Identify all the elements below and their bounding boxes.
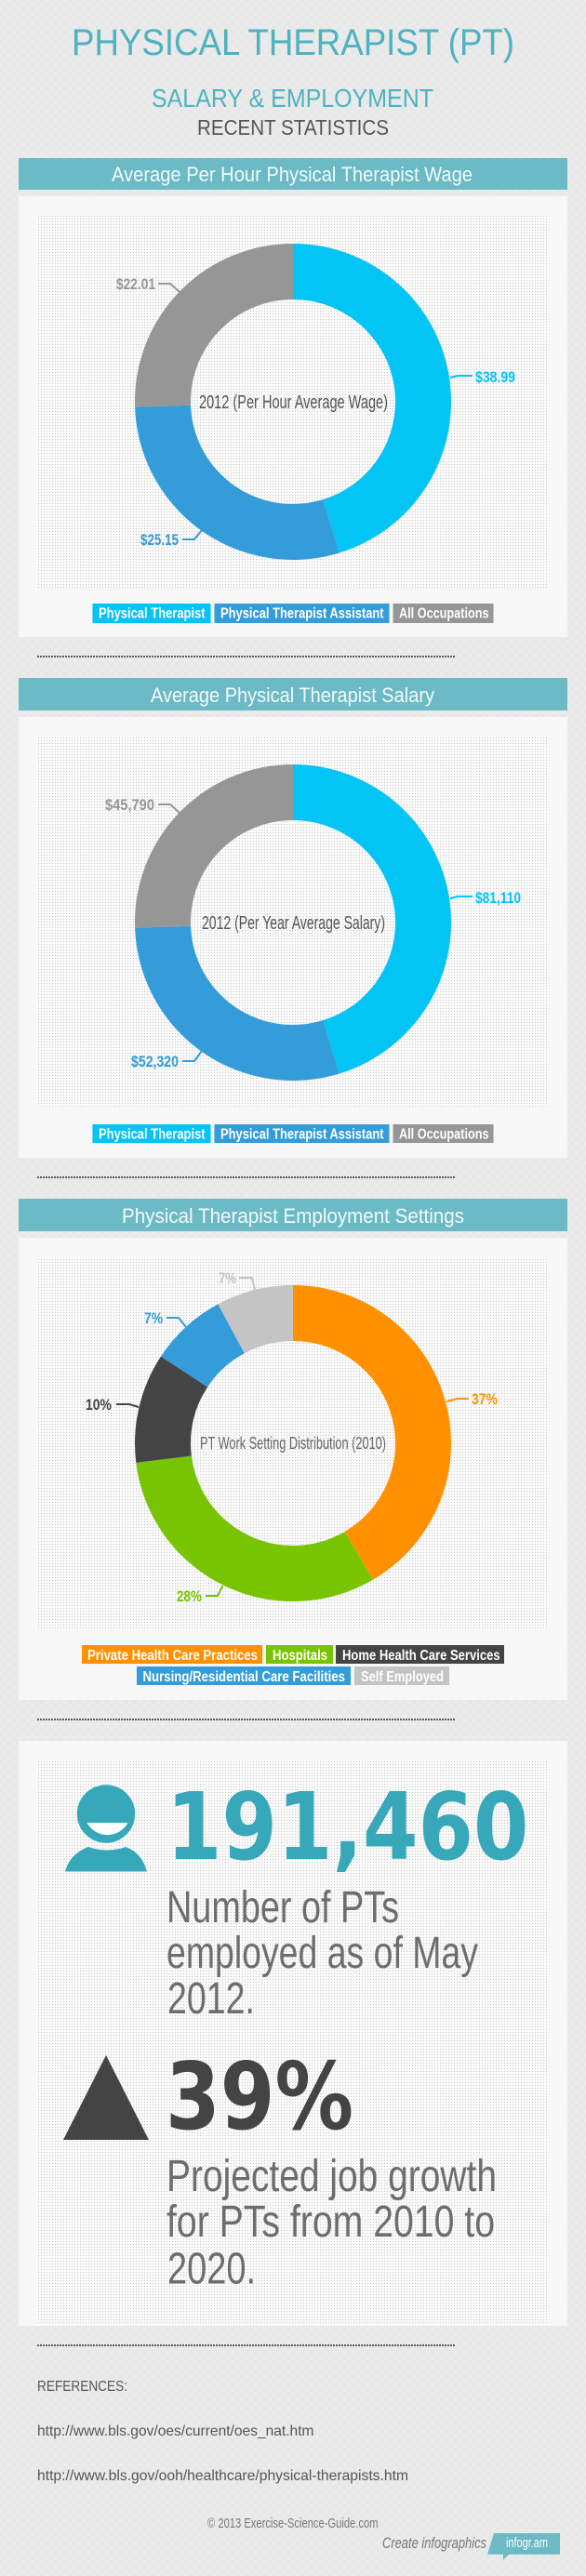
data label: assistant wage bbox=[140, 530, 202, 549]
subheading: recent statistics: RECENT STATISTICS bbox=[197, 115, 389, 139]
legend: Physical Therapist bbox=[99, 606, 206, 621]
references: http://www.bls.gov/ooh/healthcare/physical-therapists.htm bbox=[37, 2468, 408, 2484]
stat description: employed: 2012. bbox=[167, 1974, 255, 2024]
legend: Home Health Care Services bbox=[342, 1648, 500, 1664]
stat description: projected growth: 2020. bbox=[167, 2245, 256, 2293]
legend bbox=[92, 604, 494, 623]
data label: assistant salary bbox=[131, 1051, 202, 1070]
legend bbox=[82, 1645, 504, 1685]
data label: hospitals bbox=[177, 1586, 223, 1605]
legend: Private Health Care Practices bbox=[87, 1648, 258, 1664]
data label: nursing facilities: 7% bbox=[144, 1310, 163, 1327]
data label: hospitals: 28% bbox=[177, 1588, 202, 1605]
donut chart: annual salary bbox=[163, 792, 423, 1053]
legend: Nursing/Residential Care Facilities bbox=[143, 1669, 345, 1685]
stat: number of PTs: 191,460 bbox=[166, 1773, 528, 1881]
data label: physical therapist wage bbox=[450, 369, 515, 386]
icon: person bbox=[65, 1785, 147, 1871]
section header: employment settings: Physical Therapist Employment Settings bbox=[122, 1204, 464, 1228]
stat: job growth: 39% bbox=[166, 2042, 353, 2151]
data label: all occupations salary: $45,790 bbox=[105, 797, 154, 814]
chart center label: 2012 (Per Hour Average Wage) bbox=[199, 392, 388, 413]
panel: employment settings chart bbox=[19, 1238, 567, 1700]
section header: annual salary: Average Physical Therapist Salary bbox=[151, 684, 434, 707]
stat description: projected growth: for PTs from 2010 to bbox=[166, 2198, 495, 2247]
data label: physical therapist salary: $81,110 bbox=[475, 890, 521, 907]
panel: hourly wage chart bbox=[19, 196, 567, 637]
chart center label: PT Work Setting Distribution (2010) bbox=[200, 1434, 386, 1453]
legend: Physical Therapist Assistant bbox=[220, 606, 384, 621]
stat description: projected growth: Projected job growth bbox=[166, 2152, 497, 2201]
data label: self employed: 7% bbox=[219, 1270, 236, 1287]
copyright: © 2013 Exercise-Science-Guide.com bbox=[207, 2516, 378, 2531]
stat description: employed bbox=[166, 1883, 478, 2024]
legend bbox=[92, 1124, 494, 1143]
section header: employment settings bbox=[19, 1199, 567, 1231]
panel: key statistics bbox=[19, 1741, 567, 2326]
legend: All Occupations bbox=[399, 606, 489, 621]
data label: assistant wage: $25.15 bbox=[140, 532, 179, 549]
legend: Hospitals bbox=[273, 1648, 327, 1664]
donut chart: employment settings bbox=[163, 1313, 423, 1573]
references: http://www.bls.gov/oes/current/oes_nat.htm bbox=[37, 2423, 314, 2439]
data label: physical therapist salary bbox=[450, 890, 521, 907]
data label: home health: 10% bbox=[86, 1397, 112, 1414]
title: PHYSICAL THERAPIST (PT) bbox=[72, 22, 514, 63]
legend: All Occupations bbox=[399, 1127, 489, 1142]
stat description: employed: Number of PTs bbox=[166, 1883, 399, 1932]
legend: Self Employed bbox=[361, 1669, 444, 1685]
infogram credit bbox=[382, 2533, 560, 2560]
data label: home health bbox=[86, 1397, 139, 1414]
data label: physical therapist wage: $38.99 bbox=[475, 369, 515, 386]
data label: private practices: 37% bbox=[472, 1391, 498, 1408]
stat description: employed: employed as of May bbox=[166, 1929, 478, 1978]
data label: self employed bbox=[219, 1270, 255, 1290]
chart center label: 2012 (Per Year Average Salary) bbox=[202, 913, 385, 934]
donut chart: hourly wage bbox=[163, 272, 423, 532]
section header: hourly wage bbox=[19, 158, 567, 190]
icon: up triangle bbox=[63, 2055, 149, 2140]
legend: Physical Therapist Assistant bbox=[220, 1127, 384, 1142]
data label: nursing facilities bbox=[144, 1310, 186, 1327]
data label: all occupations wage: $22.01 bbox=[116, 276, 155, 293]
legend: Physical Therapist bbox=[99, 1127, 206, 1142]
section header: hourly wage: Average Per Hour Physical Therapist Wage bbox=[112, 163, 473, 186]
section header: annual salary bbox=[19, 678, 567, 710]
infogram credit: Create infographics bbox=[382, 2534, 486, 2552]
panel: annual salary chart bbox=[19, 717, 567, 1158]
data label: assistant salary: $52,320 bbox=[131, 1054, 179, 1070]
references: REFERENCES: bbox=[37, 2379, 127, 2395]
data label: private practices bbox=[446, 1391, 498, 1408]
stat description: projected growth bbox=[166, 2152, 497, 2293]
references bbox=[37, 2379, 408, 2484]
subtitle: SALARY & EMPLOYMENT bbox=[152, 84, 433, 113]
infogram credit: infogr.am bbox=[506, 2535, 548, 2551]
